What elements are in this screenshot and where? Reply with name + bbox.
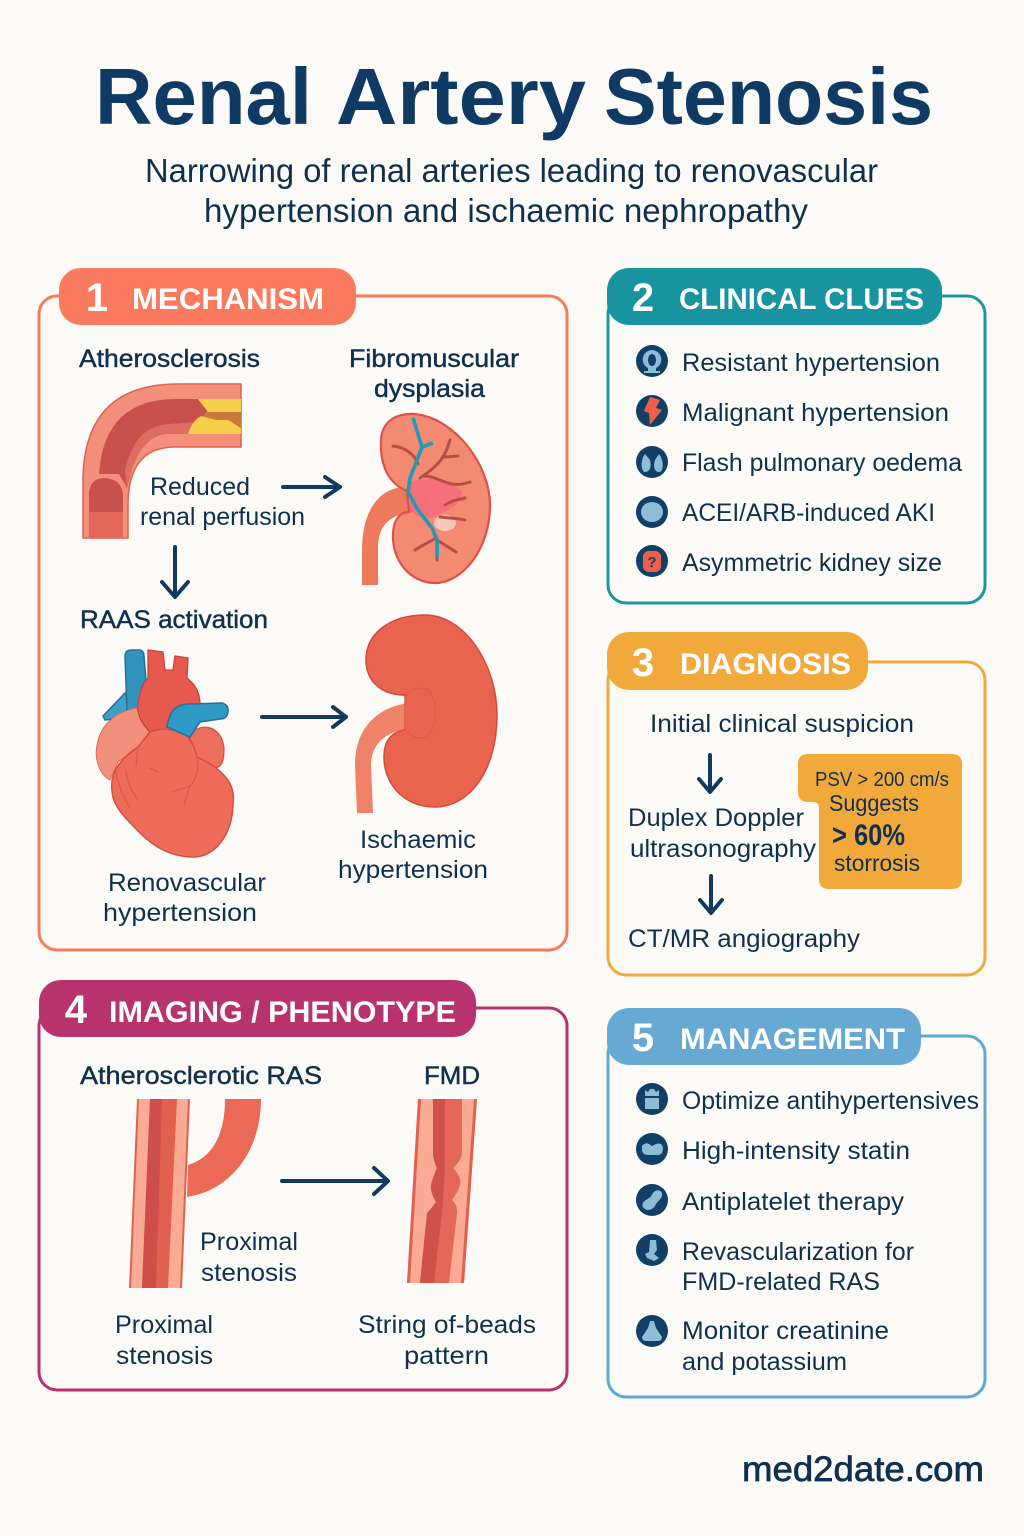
step: duplex doppler: Duplex Doppler	[628, 804, 804, 832]
heading: clinical clues: CLINICAL CLUES	[679, 283, 924, 316]
heading: mechanism: MECHANISM	[132, 283, 324, 316]
heading: imaging / phenotype: IMAGING / PHENOTYPE	[109, 996, 456, 1029]
item: revascularization for FMD-related RAS: FMD-related RAS	[682, 1268, 880, 1296]
heading: imaging / phenotype	[39, 980, 476, 1037]
callout: PSV threshold: storrosis	[834, 850, 920, 876]
subtitle	[145, 152, 878, 229]
illustration: fibromuscular kidney	[362, 414, 490, 585]
arrow: to FMD	[282, 1168, 388, 1194]
illustration: ischaemic kidney	[355, 615, 497, 813]
label: fibromuscular dysplasia: Fibromuscular	[349, 345, 519, 373]
item: high-intensity statin: High-intensity statin	[682, 1137, 910, 1165]
label: FMD: FMD	[424, 1062, 480, 1090]
clue: ACEI/ARB-induced AKI: ACEI/ARB-induced AKI	[682, 499, 935, 527]
heading: mechanism	[59, 268, 356, 325]
step: duplex doppler: ultrasonography	[630, 835, 817, 863]
panel: imaging / phenotype	[39, 980, 567, 1390]
arrow: heart to kidney	[262, 707, 346, 727]
item: monitor creatinine and potassium: Monitor creatinine	[682, 1317, 889, 1345]
label: string-of-beads pattern: String of-beads	[358, 1311, 536, 1339]
label: proximal stenosis: Proximal	[115, 1311, 213, 1339]
illustration: atherosclerotic artery branch	[129, 1099, 261, 1288]
callout: PSV threshold: Suggests	[829, 790, 919, 816]
label: proximal stenosis (branch): stenosis	[201, 1259, 297, 1287]
callout: PSV threshold: > 60%	[832, 819, 905, 852]
item: revascularization for FMD-related RAS: Revascularization for	[682, 1238, 914, 1266]
step: CT/MR angiography: CT/MR angiography	[628, 925, 861, 953]
label: fibromuscular dysplasia	[349, 345, 519, 403]
illustration: heart	[96, 650, 233, 857]
panel: mechanism	[39, 268, 567, 950]
item: revascularization for FMD-related RAS	[636, 1234, 914, 1296]
label: string-of-beads pattern: pattern	[404, 1342, 489, 1370]
label: renovascular hypertension: Renovascular	[108, 869, 266, 897]
title	[95, 52, 933, 141]
label: reduced renal perfusion: Reduced	[150, 473, 250, 501]
step: duplex doppler	[628, 804, 817, 863]
heading: clinical clues	[607, 268, 942, 325]
label: proximal stenosis (branch): Proximal	[200, 1228, 298, 1256]
heading: diagnosis: DIAGNOSIS	[680, 648, 851, 681]
label: ischaemic hypertension: Ischaemic	[360, 826, 476, 854]
label: atherosclerosis: Atherosclerosis	[79, 345, 260, 373]
callout: PSV threshold	[798, 754, 962, 889]
arrow: down to RAAS	[162, 547, 188, 597]
heading: mechanism: 1	[86, 276, 108, 320]
illustration: string of beads artery	[407, 1099, 477, 1283]
label: proximal stenosis (branch)	[200, 1228, 298, 1287]
item: antiplatelet therapy: Antiplatelet therapy	[682, 1188, 905, 1216]
title: Artery	[336, 52, 587, 141]
callout: PSV threshold: PSV > 200 cm/s	[815, 769, 949, 791]
label: renovascular hypertension: hypertension	[103, 899, 257, 927]
clue: asymmetric kidney size: Asymmetric kidney size	[682, 549, 942, 577]
label: RAAS activation: RAAS activation	[80, 606, 268, 634]
heading: diagnosis: 3	[632, 641, 654, 685]
label: ischaemic hypertension: hypertension	[338, 856, 488, 884]
heading: imaging / phenotype: 4	[65, 988, 88, 1032]
label: atherosclerotic RAS: Atherosclerotic RAS	[80, 1062, 322, 1090]
subtitle: Narrowing of renal arteries leading to renovascular	[145, 152, 878, 189]
label: reduced renal perfusion	[140, 473, 305, 531]
title: Renal	[95, 52, 312, 141]
heading: diagnosis	[607, 632, 868, 690]
panel: diagnosis	[607, 632, 985, 975]
label: fibromuscular dysplasia: dysplasia	[374, 375, 485, 403]
item: monitor creatinine and potassium: and potassium	[682, 1348, 847, 1376]
arrow: to kidney	[283, 477, 340, 497]
footer: website: med2date.com	[742, 1450, 984, 1489]
item: antiplatelet therapy	[636, 1184, 905, 1216]
label: reduced renal perfusion: renal perfusion	[140, 503, 305, 531]
heading: management	[607, 1008, 921, 1065]
heading: management: 5	[632, 1016, 654, 1060]
panel: management	[607, 1008, 985, 1397]
step: initial clinical suspicion: Initial clinical suspicion	[650, 710, 914, 738]
label: ischaemic hypertension	[338, 826, 488, 884]
heading: management: MANAGEMENT	[680, 1023, 905, 1056]
label: proximal stenosis: stenosis	[116, 1342, 213, 1370]
clue: resistant hypertension: Resistant hypertension	[682, 349, 940, 377]
arrow: down to duplex	[699, 755, 721, 792]
label: proximal stenosis	[115, 1311, 213, 1370]
heading: clinical clues: 2	[632, 276, 654, 320]
item: high-intensity statin	[636, 1133, 910, 1165]
item: monitor creatinine and potassium	[636, 1315, 889, 1376]
illustration: atherosclerotic artery	[83, 384, 241, 538]
panel: clinical clues	[607, 268, 985, 603]
arrow: down to CT/MR	[700, 876, 722, 913]
title: Stenosis	[604, 52, 933, 141]
item: optimize antihypertensives: Optimize antihypertensives	[682, 1087, 979, 1115]
clue: asymmetric kidney size: ?	[647, 554, 657, 571]
clue: malignant hypertension: Malignant hypertension	[682, 399, 949, 427]
label: renovascular hypertension	[103, 869, 266, 927]
clue: flash pulmonary oedema: Flash pulmonary oedema	[682, 449, 962, 477]
label: string-of-beads pattern	[358, 1311, 536, 1370]
subtitle: hypertension and ischaemic nephropathy	[204, 192, 809, 229]
